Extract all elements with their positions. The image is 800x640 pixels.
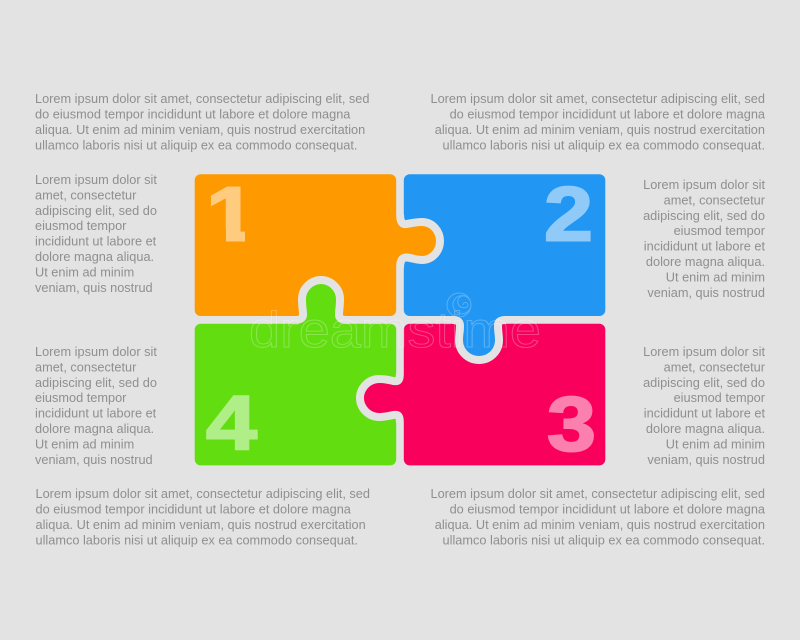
- text block: right upper: [643, 177, 766, 300]
- number 2: 2: [544, 172, 593, 258]
- notch outline in orange piece: [295, 284, 347, 324]
- text block: right upper: Lorem ipsum dolor sit: [643, 177, 765, 192]
- text block: left upper: [35, 172, 157, 295]
- text block: left upper: veniam, quis nostrud: [35, 280, 153, 295]
- text block: right upper: amet, consectetur: [664, 192, 766, 207]
- text block: left upper: incididunt ut labore et: [35, 234, 157, 249]
- notch outline in green piece: [364, 373, 404, 423]
- text block: left upper: eiusmod tempor: [35, 218, 127, 233]
- text block: left upper: adipiscing elit, sed do: [35, 203, 157, 218]
- text block: bottom right: Lorem ipsum dolor sit amet, consectetur adipiscing elit, sed: [430, 486, 765, 501]
- orange tab: [396, 214, 436, 268]
- text block: right lower: Ut enim ad minim: [666, 436, 765, 451]
- text block: bottom right: ullamco laboris nisi ut aliquip ex ea commodo consequat.: [443, 532, 765, 548]
- text block: bottom left: [36, 486, 370, 548]
- text block: top right: Lorem ipsum dolor sit amet, consectetur adipiscing elit, sed: [430, 91, 765, 106]
- text block: right lower: adipiscing elit, sed do: [643, 375, 765, 390]
- watermark word: dreamstime: [249, 302, 541, 358]
- puzzle piece 2: blue body: [404, 174, 605, 316]
- number 1: 1: [206, 172, 256, 258]
- text block: right upper: veniam, quis nostrud: [647, 285, 765, 300]
- notch outline in red piece: [452, 316, 506, 356]
- text block: top left: aliqua. Ut enim ad minim veniam, quis nostrud exercitation: [35, 122, 365, 137]
- text block: left lower: Ut enim ad minim: [35, 436, 134, 451]
- text block: bottom left: Lorem ipsum dolor sit amet, consectetur adipiscing elit, sed: [36, 486, 370, 501]
- text block: left upper: Lorem ipsum dolor sit: [35, 172, 157, 187]
- text block: right upper: Ut enim ad minim: [666, 269, 765, 284]
- text block: right lower: Lorem ipsum dolor sit: [643, 344, 765, 359]
- puzzle piece 1: orange body: [195, 174, 396, 316]
- number 3: 3: [547, 382, 596, 468]
- text block: left lower: incididunt ut labore et: [35, 406, 157, 421]
- text block: right lower: amet, consectetur: [664, 359, 766, 374]
- text block: right upper: incididunt ut labore et: [644, 239, 765, 254]
- text block: left lower: adipiscing elit, sed do: [35, 375, 157, 390]
- red tab: [364, 373, 404, 423]
- text block: top right: ullamco laboris nisi ut aliquip ex ea commodo consequat.: [443, 138, 765, 152]
- text block: left lower: veniam, quis nostrud: [35, 452, 153, 467]
- text block: left lower: amet, consectetur: [35, 359, 137, 374]
- text block: top left: Lorem ipsum dolor sit amet, consectetur adipiscing elit, sed: [35, 91, 370, 106]
- notch outline in blue piece: [396, 214, 436, 268]
- text block: top right: do eiusmod tempor incididunt ut labore et dolore magna: [450, 106, 766, 122]
- number 4: 4: [206, 380, 257, 466]
- text block: right lower: eiusmod tempor: [674, 390, 766, 405]
- text block: right lower: dolore magna aliqua.: [646, 421, 765, 436]
- text block: bottom right: aliqua. Ut enim ad minim veniam, quis nostrud exercitation: [435, 517, 765, 532]
- text block: bottom left: ullamco laboris nisi ut aliquip ex ea commodo consequat.: [36, 532, 358, 548]
- green tab: [295, 284, 347, 324]
- text block: bottom left: aliqua. Ut enim ad minim veniam, quis nostrud exercitation: [36, 517, 366, 532]
- text block: left lower: dolore magna aliqua.: [35, 421, 154, 436]
- text block: right lower: [643, 344, 766, 467]
- text block: right lower: incididunt ut labore et: [644, 406, 765, 421]
- text block: left lower: eiusmod tempor: [35, 390, 127, 405]
- text block: bottom right: do eiusmod tempor incididunt ut labore et dolore magna: [450, 502, 766, 516]
- text block: right lower: veniam, quis nostrud: [647, 452, 765, 467]
- text block: left upper: Ut enim ad minim: [35, 264, 134, 279]
- puzzle piece 4: green body: [195, 324, 396, 465]
- text block: left lower: Lorem ipsum dolor sit: [35, 344, 157, 359]
- text block: left upper: dolore magna aliqua.: [35, 249, 154, 264]
- text block: right upper: eiusmod tempor: [674, 223, 766, 238]
- text block: bottom left: do eiusmod tempor incididunt ut labore et dolore magna: [36, 502, 352, 516]
- text block: top right: aliqua. Ut enim ad minim veniam, quis nostrud exercitation: [435, 122, 765, 137]
- text block: bottom right: [430, 486, 766, 548]
- text block: right upper: adipiscing elit, sed do: [643, 208, 765, 223]
- text block: left upper: amet, consectetur: [35, 187, 137, 202]
- watermark spiral: [447, 293, 471, 317]
- puzzle diagram: [195, 172, 605, 468]
- text block: top right: [430, 91, 766, 152]
- text block: top left: do eiusmod tempor incididunt ut labore et dolore magna: [35, 106, 351, 122]
- text block: left lower: [35, 344, 157, 467]
- watermark: [249, 293, 541, 358]
- blue tab: [452, 316, 506, 356]
- puzzle piece 3: red body: [404, 324, 605, 465]
- text block: top left: ullamco laboris nisi ut aliquip ex ea commodo consequat.: [35, 138, 357, 152]
- text block: right upper: dolore magna aliqua.: [646, 254, 765, 269]
- text block: top left: [35, 91, 370, 152]
